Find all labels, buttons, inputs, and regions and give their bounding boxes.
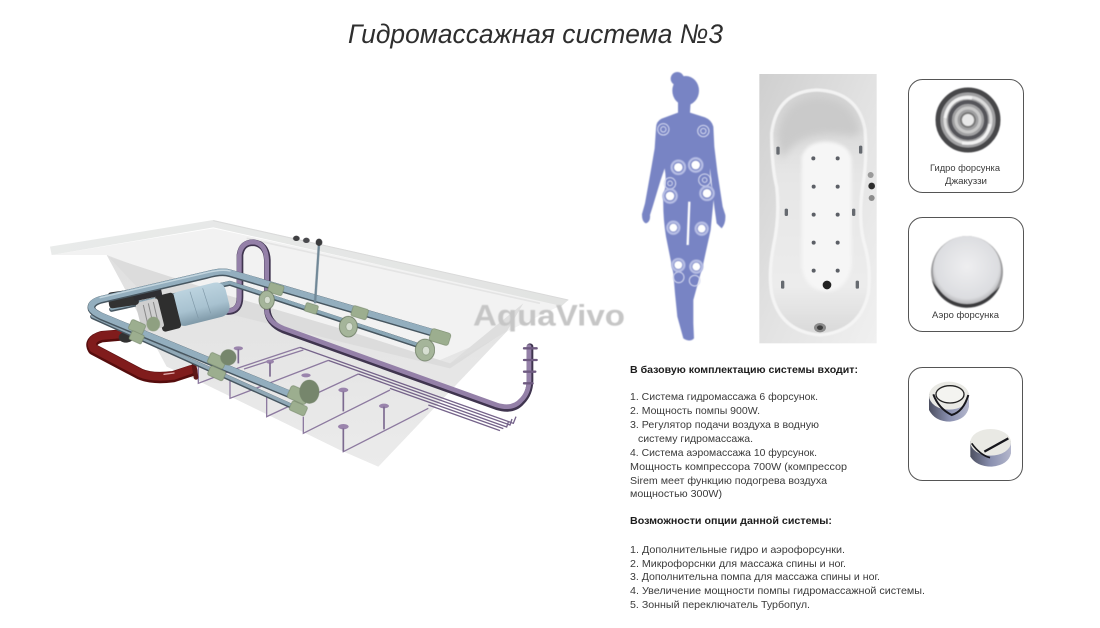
panel: aero jet: [908, 218, 1024, 332]
basin shading: [777, 97, 861, 160]
basin floor: [802, 142, 852, 292]
system options list: 3. Дополнительна помпа для массажа спины и ног.: [630, 571, 880, 583]
caption: aero jet: Аэро форсунка: [932, 310, 1000, 321]
front blue water pipes: [91, 270, 440, 410]
base configuration list: мощностью 300W): [630, 488, 722, 500]
system options list: 4. Увеличение мощности помпы гидромассажной системы.: [630, 585, 925, 597]
micro jet two: [970, 429, 1011, 467]
base configuration list: [630, 391, 847, 500]
air jets: [811, 156, 840, 273]
base configuration list: систему гидромассажа.: [638, 433, 753, 445]
caption: hydro jet: Гидро форсунка: [930, 163, 1001, 174]
base configuration list: 2. Мощность помпы 900W.: [630, 405, 760, 417]
system options list: 5. Зонный переключатель Турбопул.: [630, 599, 810, 611]
drain and overflow: [823, 281, 831, 289]
illustration: bathtub with hydromassage piping: [50, 220, 625, 467]
hydro jets: [776, 146, 862, 289]
system options list: 2. Микрофорснки для массажа спины и ног.: [630, 558, 846, 570]
micro jet one: [929, 382, 969, 422]
translucent tub shell: [50, 220, 568, 467]
side controls: [868, 172, 875, 201]
panel: hydro jet: [908, 80, 1024, 192]
air regulator control knobs: [293, 236, 322, 303]
pump and motor: [107, 280, 232, 343]
watermark: AquaVivo: [473, 299, 625, 332]
tub basin: [770, 90, 869, 335]
heading: system options: Возможности опции данной системы:: [630, 515, 832, 527]
system options list: [630, 544, 925, 611]
base configuration list: 4. Система аэромассажа 10 фурсунок.: [630, 447, 817, 459]
title: Гидромассажная система №3: [348, 19, 723, 49]
base configuration list: 1. Система гидромассажа 6 форсунок.: [630, 391, 818, 403]
red hose: [92, 334, 196, 378]
text block: base configuration: [630, 364, 858, 500]
air line bundle and micro jets: [198, 346, 516, 452]
panel frame: [908, 80, 1024, 192]
icon: chrome aero jet: [931, 236, 1003, 308]
caption: jacuzzi: Джакуззи: [945, 176, 987, 187]
green collars and hydro jets: [128, 282, 451, 416]
panel: micro jets: [908, 368, 1022, 480]
base configuration list: 3. Регулятор подачи воздуха в водную: [630, 419, 819, 431]
base configuration list: Мощность компрессора 700W (компрессор: [630, 461, 847, 473]
icon: micro jets: [929, 382, 1011, 467]
icon: chrome hydro jet: [936, 88, 1000, 152]
purple hydro pipe: [222, 242, 537, 408]
system options list: 1. Дополнительные гидро и аэрофорсунки.: [630, 544, 845, 556]
panel frame: [908, 368, 1022, 480]
female body silhouette: [642, 72, 725, 340]
silhouette with massage zones: [642, 72, 725, 340]
back blue water pipes: [112, 283, 417, 345]
base configuration list: Sirem меет функцию подогрева воздуха: [630, 475, 827, 487]
heading: base configuration: В базовую комплектацию системы входит:: [630, 364, 858, 376]
buttock gap: [688, 202, 689, 245]
massage zone markers: [658, 124, 714, 286]
tub deck: [759, 74, 877, 343]
bathtub top-view photo: [759, 74, 877, 343]
panel frame: [908, 218, 1024, 332]
text block: system options: [630, 515, 925, 611]
